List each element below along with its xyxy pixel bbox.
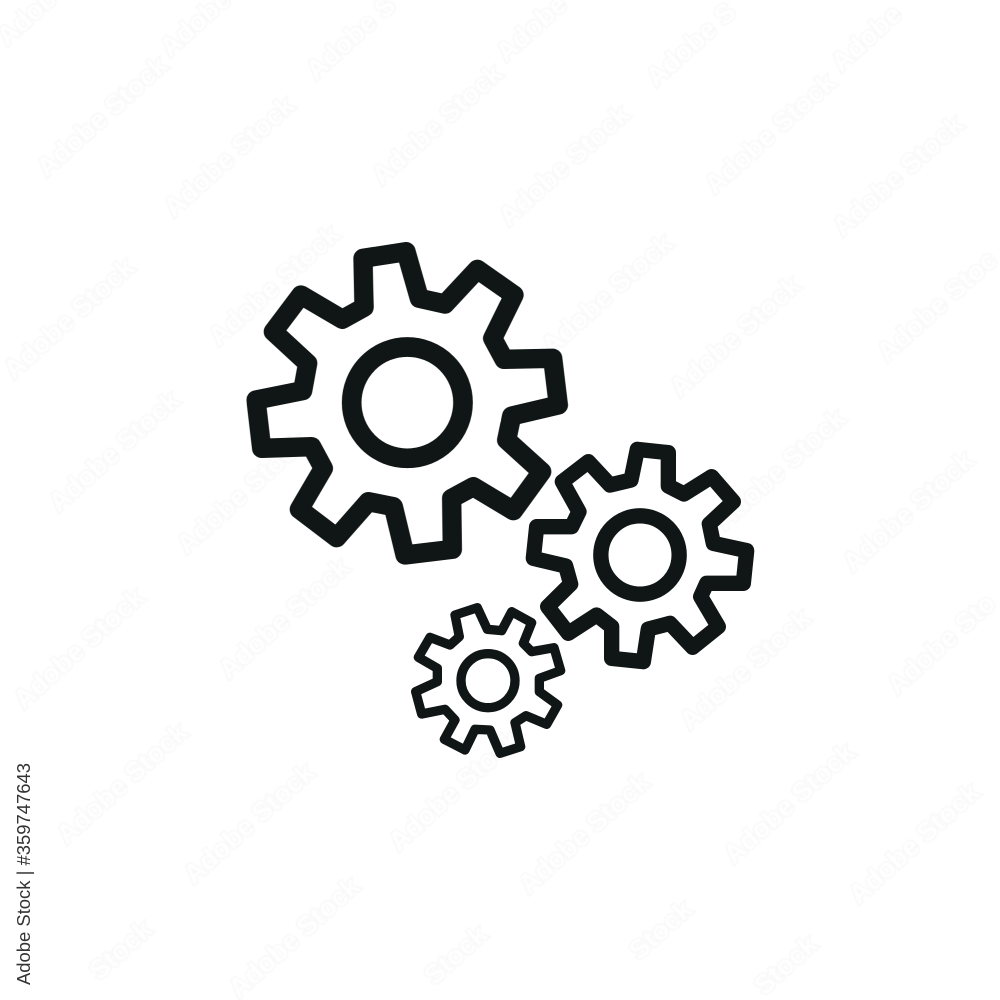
watermark pattern: Stock xyxy=(418,919,494,991)
watermark pattern: Adobe Stock xyxy=(8,581,151,715)
watermark pattern: Adobe Stock xyxy=(51,716,194,850)
watermark pattern: Adobe Stock xyxy=(843,776,986,910)
watermark pattern: Adobe Stock xyxy=(43,384,186,518)
watermark pattern: Adobe Stock xyxy=(493,98,636,232)
watermark pattern: Adobe Stock xyxy=(536,227,679,361)
icon: medium gear xyxy=(533,449,747,662)
watermark pattern: Adobe Stock xyxy=(674,602,817,736)
stock image id label: Adobe Stock | #359747643 xyxy=(13,763,34,985)
watermark pattern: Stock xyxy=(623,894,699,966)
watermark pattern: Adobe Stock xyxy=(203,218,346,352)
watermark pattern: Adobe Stock xyxy=(213,551,356,685)
watermark pattern: Adobe Stock xyxy=(699,66,842,200)
watermark pattern: Adobe Stock xyxy=(664,269,807,403)
watermark pattern: Adobe Stock xyxy=(513,766,656,900)
watermark pattern: Adobe Stock xyxy=(171,426,314,560)
watermark pattern: Stock xyxy=(748,929,824,1000)
icon: small gear xyxy=(416,608,561,753)
watermark pattern: Adobe Sto xyxy=(881,588,1000,700)
watermark pattern: Adobe xyxy=(825,0,907,77)
watermark pattern: Adobe Stock xyxy=(827,108,970,242)
watermark pattern: Adobe Stock xyxy=(178,756,321,890)
watermark pattern: Adobe Stock xyxy=(158,89,301,223)
watermark pattern: Adobe Stock xyxy=(0,251,141,385)
watermark pattern: Adobe Stoc xyxy=(871,245,1000,367)
watermark pattern: Adobe Stock xyxy=(709,402,852,536)
watermark pattern: Stock xyxy=(83,914,159,986)
watermark pattern: Adobe Stock xyxy=(366,57,509,191)
watermark pattern: Adobe Stock xyxy=(223,870,366,1000)
watermark pattern: Adobe Stock xyxy=(31,49,174,183)
watermark pattern: Adobe Stock xyxy=(718,736,861,870)
watermark pattern: Adobe Stock xyxy=(383,723,526,857)
icon: large gear xyxy=(256,252,558,555)
watermark pattern: Adobe Stock xyxy=(837,444,980,578)
